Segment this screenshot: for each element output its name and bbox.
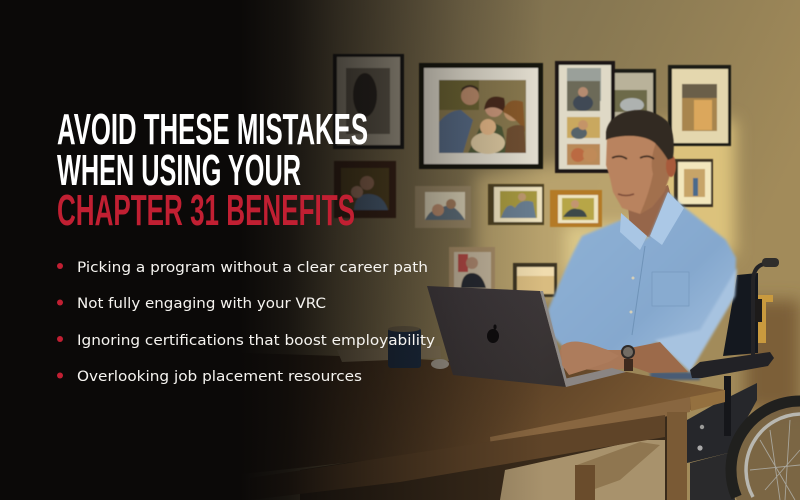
trousers xyxy=(500,440,665,500)
man: forearm, hand and watch xyxy=(560,342,688,376)
bullet 1: Picking a program without a clear career path xyxy=(77,260,428,276)
wheelchair back and handle xyxy=(723,258,779,356)
man: shirt and torso xyxy=(548,192,737,380)
heading line 2: WHEN USING YOUR xyxy=(57,146,301,195)
bullet 2: Not fully engaging with your VRC xyxy=(77,296,326,312)
man: head xyxy=(606,110,676,214)
frame: family outdoors xyxy=(488,184,544,225)
frame: light wood xyxy=(415,186,471,228)
frame: military portrait xyxy=(449,247,495,289)
desk xyxy=(0,345,725,500)
heading xyxy=(57,105,368,235)
frame: orange wood xyxy=(550,190,602,227)
frame: shadow-box with three photos xyxy=(555,61,615,173)
hand on keyboard xyxy=(561,342,619,375)
frame: right small xyxy=(674,159,713,207)
frame: top-left portrait xyxy=(333,54,404,149)
laptop logo xyxy=(487,324,499,343)
wheelchair seat and wheel xyxy=(687,383,800,500)
heading line 3, red: CHAPTER 31 BENEFITS xyxy=(57,186,355,235)
laptop xyxy=(427,286,626,387)
picture frames xyxy=(333,54,731,297)
mug, notebook and mouse xyxy=(337,326,449,369)
heading line 1: AVOID THESE MISTAKES xyxy=(57,105,368,154)
frame: landscape xyxy=(513,263,557,297)
bullet 3: Ignoring certifications that boost employability xyxy=(77,333,435,349)
bullet 4: Overlooking job placement resources xyxy=(77,369,362,385)
frame: large family photo xyxy=(419,63,543,169)
floor and under-table area xyxy=(300,410,680,500)
man: neck xyxy=(628,185,672,240)
frame: couple in dark wood xyxy=(334,161,396,218)
shirt details xyxy=(620,192,689,335)
wheelchair armrest xyxy=(690,352,774,436)
desk leg xyxy=(667,412,687,500)
bullet list xyxy=(57,260,435,385)
frame: behind shadow-box xyxy=(612,69,656,124)
sunlight patches on wall xyxy=(475,120,800,410)
frame: top-right xyxy=(668,65,731,146)
